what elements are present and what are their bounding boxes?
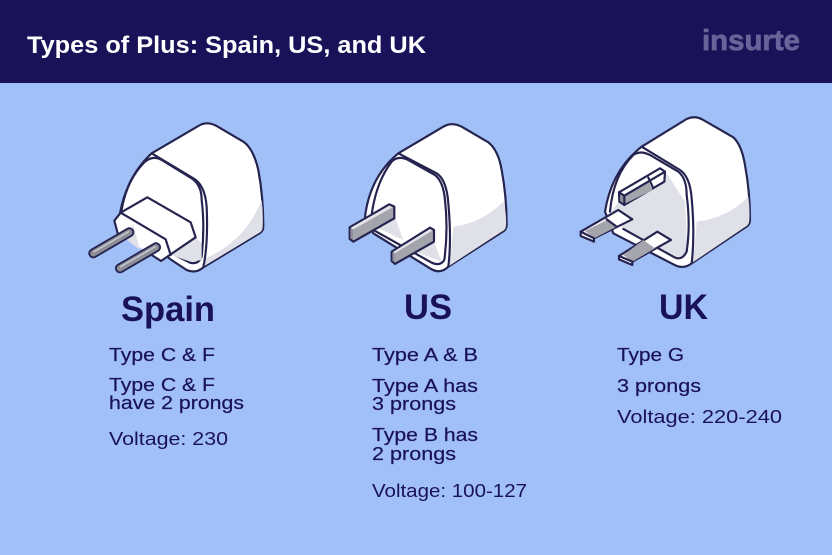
voltage: Voltage: 230: [109, 428, 228, 449]
plug type: Type G: [617, 344, 684, 365]
header banner: [0, 0, 832, 83]
heading: UK: UK: [659, 288, 708, 327]
column: UK: [617, 288, 782, 427]
type B prongs: Type B has: [372, 424, 478, 445]
prongs: have 2 prongs: [109, 392, 244, 413]
voltage: Voltage: 100-127: [372, 480, 527, 501]
plug types: Type C & F: [109, 344, 215, 365]
type B prongs: 2 prongs: [372, 443, 456, 464]
heading: Spain: Spain: [121, 290, 215, 329]
heading: US: US: [404, 288, 452, 327]
pin: lower left: [581, 210, 632, 242]
pin: top: [619, 168, 665, 205]
prongs: Type C & F: [109, 374, 215, 395]
pin: lower right: [619, 232, 671, 265]
plug types: Type A & B: [372, 344, 478, 365]
type A prongs: 3 prongs: [372, 393, 456, 414]
prongs: 3 prongs: [617, 375, 701, 396]
column: Spain: [109, 290, 244, 449]
icon: Spain plug: [93, 123, 263, 271]
blade: left: [350, 204, 394, 242]
logo: insurte: insurte: [702, 25, 800, 57]
title: Types of Plus: Spain, US, and UK: [27, 32, 427, 59]
column: US: [372, 288, 527, 501]
icon: US plug: [350, 124, 507, 271]
voltage: Voltage: 220-240: [617, 406, 782, 427]
type A prongs: Type A has: [372, 375, 478, 396]
icon: UK plug: [581, 117, 750, 267]
blade: right: [392, 228, 434, 264]
